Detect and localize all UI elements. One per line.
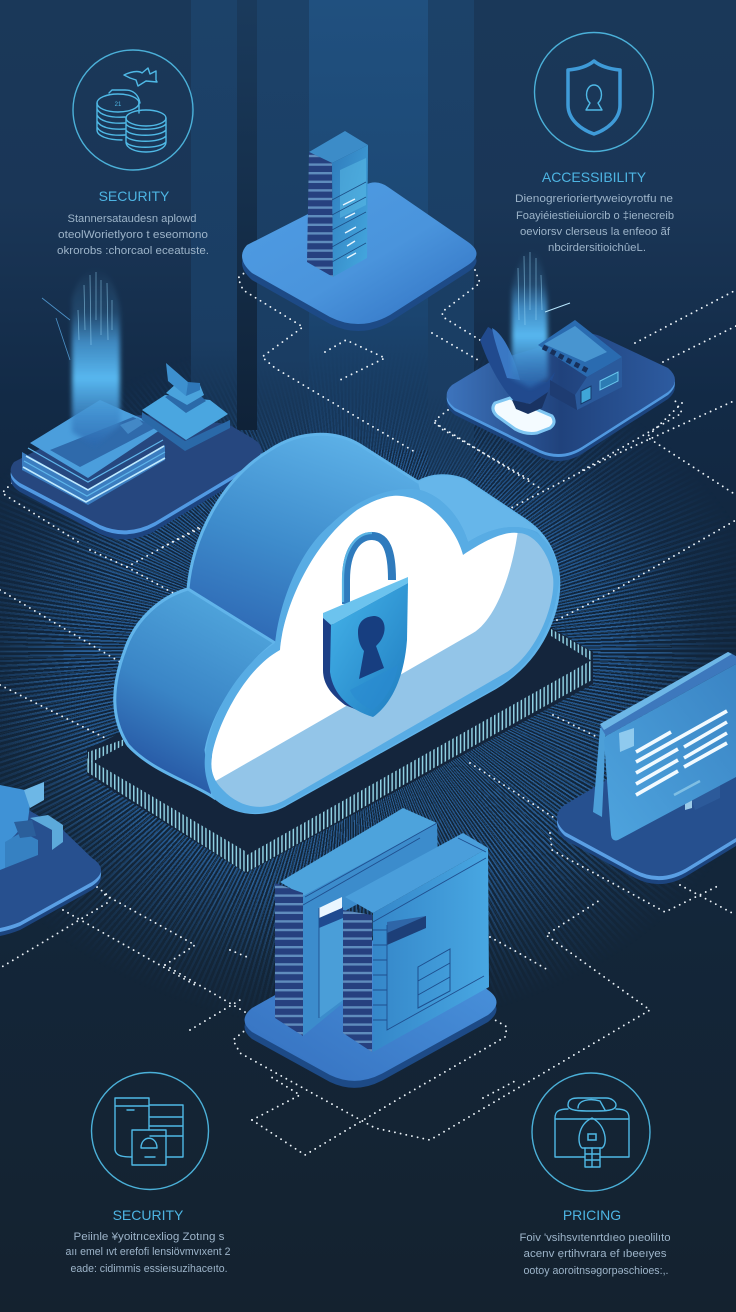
body text: nbcirdersitioichûeL.	[548, 242, 646, 254]
body text: eade: cidimmis essieısuzihaceıto.	[70, 1263, 228, 1275]
panel: central chip base	[87, 627, 593, 873]
icon: data light column	[512, 250, 570, 388]
cloud left lobe	[115, 589, 275, 797]
panel: security bottom left	[66, 1072, 230, 1275]
icon: rack unit	[538, 320, 622, 410]
body text	[66, 1231, 230, 1275]
body text	[57, 213, 209, 257]
cloud front face	[211, 496, 554, 807]
body text: okrorobs :chorcaol eceatuste.	[57, 245, 209, 257]
body text: oteolWorietlyoro t eseomono	[58, 229, 208, 241]
body text: Foiv 'vsihsvıtenrtdıeo pıeolilıto	[520, 1232, 670, 1244]
icon: stacked disks: 21	[115, 102, 122, 108]
panel: left storage platform	[11, 268, 262, 539]
body text: Stannersataudesn aplowd	[68, 213, 196, 225]
panel: cloud	[115, 434, 570, 820]
panel: right hardware platform	[447, 250, 675, 461]
body text: Foayiéiestieiuiorcib o ‡ienecreib	[516, 210, 674, 222]
heading: SECURITY	[99, 188, 170, 204]
cloud back right lobe	[418, 476, 537, 542]
panel: monitor platform	[557, 652, 736, 884]
body text: acenv ẹrtihvrara ef ıbeeıyes	[524, 1248, 667, 1260]
panel: left edge platform	[0, 782, 101, 936]
panel: pricing	[520, 1073, 670, 1277]
panel: bottom server platform	[244, 808, 496, 1088]
body text: ootoy aoroitnsəgorpəschioes:,.	[524, 1265, 668, 1277]
body text: aıı emel ıvt erefofi lensiövmvıxent 2	[66, 1246, 230, 1258]
background columns	[191, 0, 474, 485]
cloud front rim	[205, 489, 559, 813]
icon: back server	[275, 808, 438, 1036]
panel: top server platform	[242, 131, 476, 331]
panel: security top left	[57, 50, 209, 257]
body text: oeviorsv clerseus la enfeoo ãf	[520, 226, 671, 238]
icon: layered data stack	[22, 400, 165, 505]
icon: locked device	[532, 1073, 650, 1191]
dotted circuit connectors	[0, 270, 736, 1155]
chip pins	[87, 629, 592, 872]
heading: ACCESSIBILITY	[542, 169, 647, 185]
icon: documents with lock	[92, 1072, 208, 1190]
heading: PRICING	[563, 1207, 621, 1223]
icon: stepped pedestal	[142, 363, 230, 451]
icon: glowing pad	[493, 398, 554, 434]
icon: puzzle blocks	[0, 782, 63, 870]
body text: Peiinle ¥yoitrıcexliog Zotıng s	[74, 1231, 225, 1243]
body text	[515, 193, 674, 254]
body text: Dienogrerioriertyweioyrotfu ne	[515, 193, 673, 205]
icon: front server	[343, 833, 489, 1052]
cloud extruded body	[115, 434, 559, 813]
icon: machine leaves	[480, 327, 555, 414]
icon: stacked disks	[73, 50, 193, 170]
padlock	[323, 533, 408, 717]
icon: data light column	[42, 268, 120, 446]
icon: shield keyhole	[534, 32, 654, 152]
icon: server tower	[307, 131, 368, 277]
panel: accessibility	[515, 32, 674, 254]
body text	[520, 1232, 670, 1277]
heading: SECURITY	[113, 1207, 184, 1223]
icon: monitor	[593, 652, 736, 840]
